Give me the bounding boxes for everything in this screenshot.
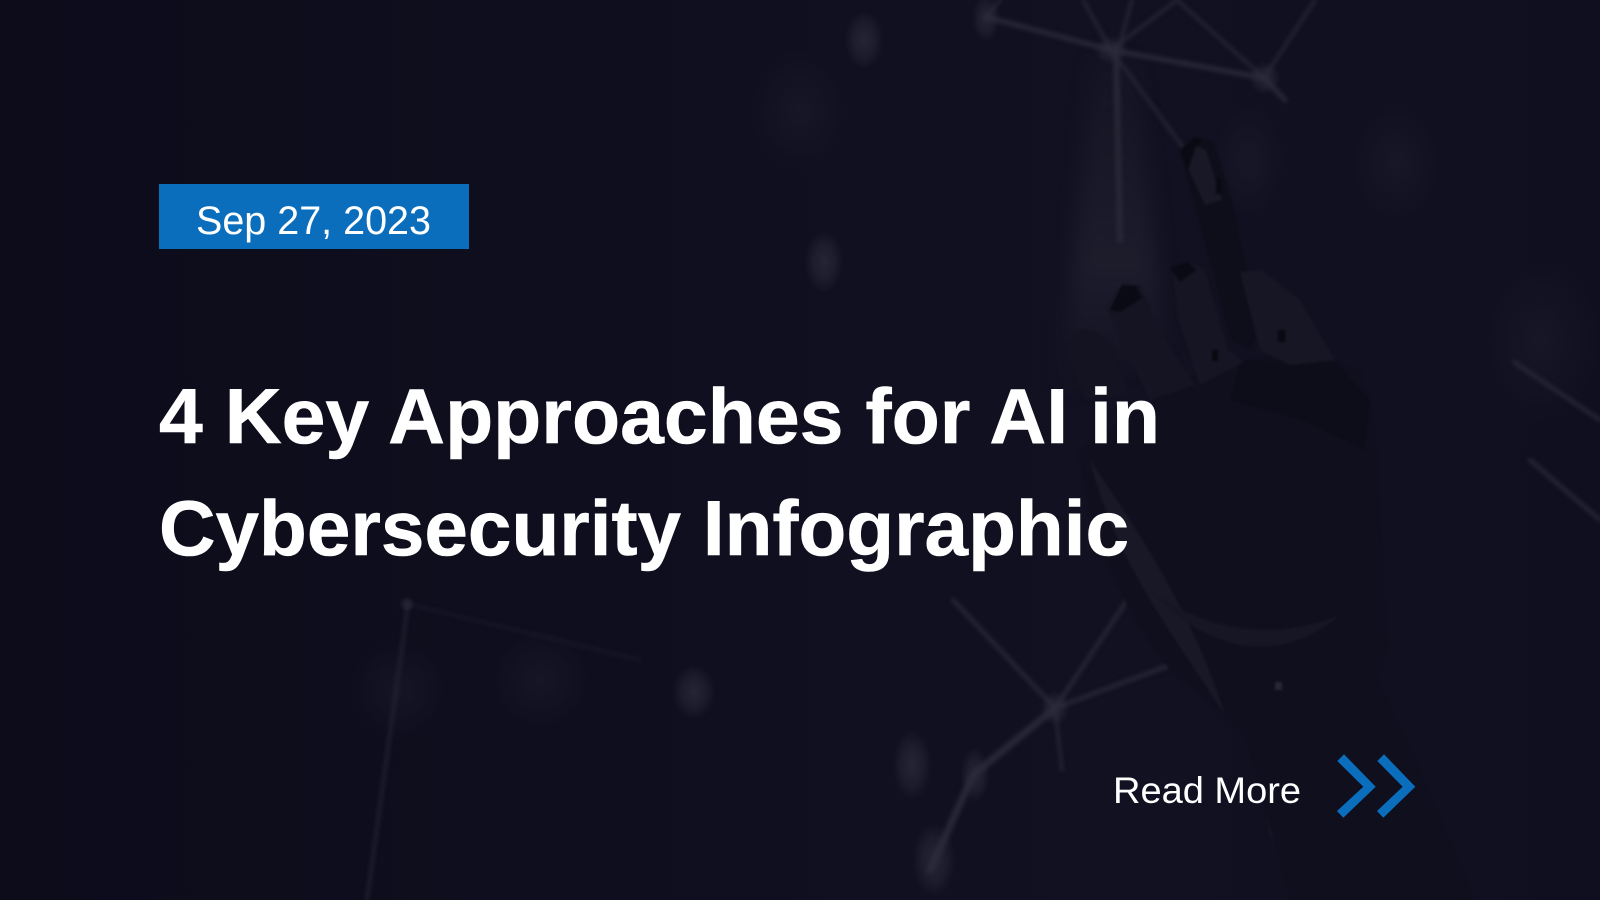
- robot hand: [1065, 137, 1473, 900]
- read more link: Read More: [1113, 770, 1301, 811]
- date badge: Sep 27, 2023: [196, 199, 431, 243]
- icon: double chevron arrow: [1337, 754, 1415, 818]
- title: [159, 372, 1160, 572]
- title: Cybersecurity Infographic: [159, 484, 1129, 572]
- date badge: [159, 184, 469, 249]
- title: 4 Key Approaches for AI in: [159, 372, 1160, 460]
